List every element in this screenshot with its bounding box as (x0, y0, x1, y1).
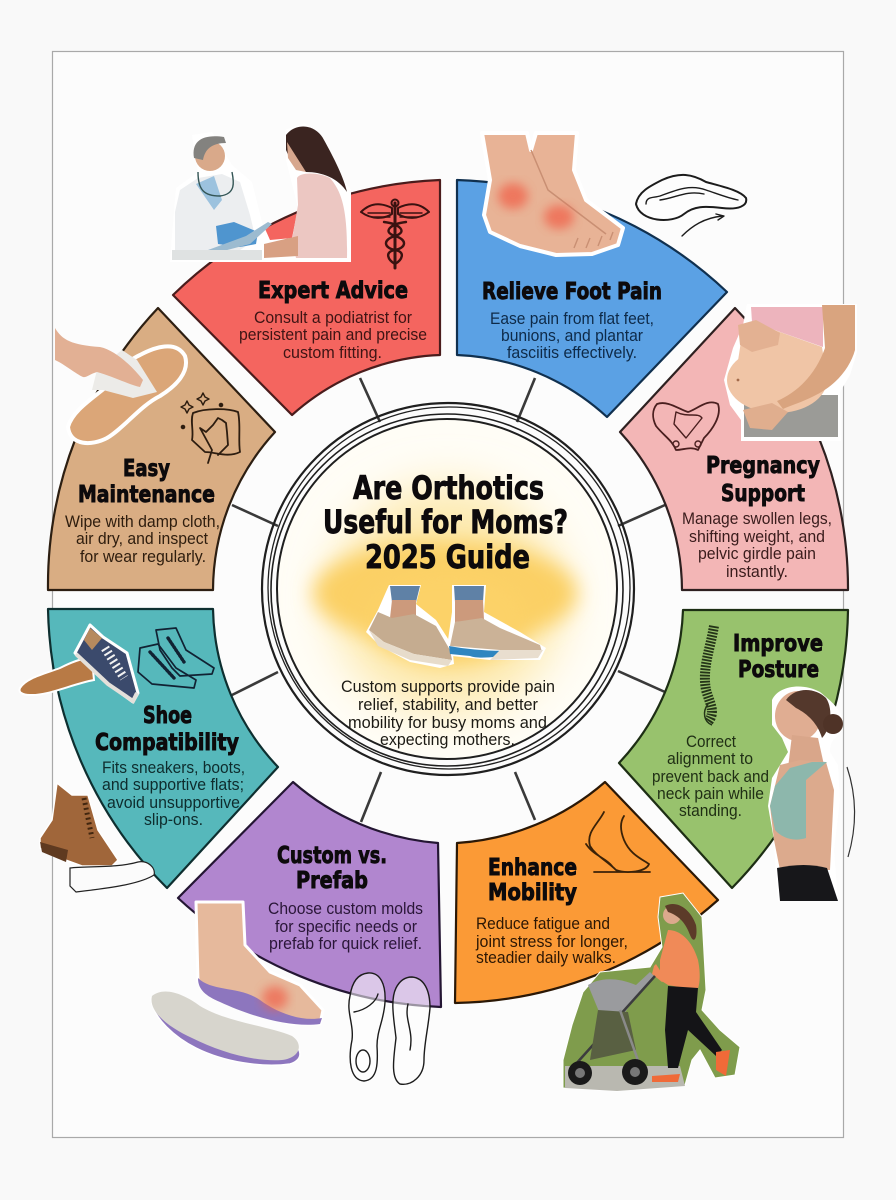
title: 2025 Guide (365, 538, 530, 576)
photo: white flat (70, 862, 154, 892)
panel: custom vs prefab (151, 782, 441, 1084)
description: Consult a podiatrist for (254, 308, 412, 327)
description: custom fitting. (283, 343, 382, 362)
photo: pregnant belly (724, 304, 857, 441)
green sector (619, 610, 848, 888)
panel: shoe compatibility (19, 609, 278, 892)
description: alignment to (667, 749, 753, 768)
heading: Posture (738, 657, 819, 683)
description (652, 732, 769, 820)
description: avoid unsupportive (107, 793, 240, 812)
panel: easy maintenance (48, 308, 275, 590)
description: Custom supports provide pain (341, 677, 555, 696)
heading (733, 631, 823, 683)
description: Correct (686, 732, 736, 751)
photo: supportive sneakers (366, 585, 546, 668)
icon: insole pair outlines (349, 973, 430, 1084)
description: Wipe with damp cloth, (65, 512, 220, 531)
description (475, 914, 628, 967)
description: expecting mothers. (380, 730, 515, 749)
description: fasciitis effectively. (507, 343, 637, 362)
description: joint stress for longer, (475, 932, 628, 951)
heading: Relieve Foot Pain (482, 279, 662, 305)
panel: central hub (262, 403, 634, 775)
photo: foot on insole (196, 902, 323, 1025)
pink sector (620, 308, 848, 590)
blue sector (457, 180, 727, 417)
description: and supportive flats; (102, 775, 244, 794)
description (65, 512, 220, 566)
description (341, 677, 555, 749)
title (323, 469, 568, 576)
heading: Compatibility (95, 730, 239, 756)
tan sector (48, 308, 275, 590)
description (268, 899, 423, 953)
panel: expert advice (170, 123, 440, 415)
spokes connecting hub to panels (232, 378, 665, 822)
icon: spine (705, 626, 714, 725)
description: for wear regularly. (80, 547, 206, 566)
photo: mother walking with stroller (563, 893, 740, 1091)
heading: Shoe (143, 703, 192, 729)
heading: Pregnancy (706, 453, 820, 479)
teal sector (48, 609, 278, 888)
description: standing. (679, 801, 742, 820)
description: slip-ons. (144, 810, 203, 829)
icon: insole sketch with arrow (636, 175, 746, 236)
description: for specific needs or (275, 917, 417, 936)
description: air dry, and inspect (76, 529, 208, 548)
heading: Mobility (488, 880, 577, 906)
heading (78, 456, 215, 508)
heading (95, 703, 239, 756)
description: mobility for busy moms and (348, 713, 547, 732)
heading: Maintenance (78, 482, 215, 508)
description: neck pain while (657, 784, 764, 803)
panel: relieve foot pain (457, 133, 746, 417)
description: Choose custom molds (268, 899, 423, 918)
description: relief, stability, and better (358, 695, 538, 714)
photo: ballet flat (19, 659, 94, 695)
decorative curve (847, 767, 855, 857)
description (682, 509, 832, 581)
photo: leather boot (40, 783, 118, 866)
title: Are Orthotics (353, 469, 544, 507)
photo: doctor and patient (170, 123, 351, 262)
frame (52, 52, 844, 1138)
panel: enhance mobility (455, 782, 740, 1091)
heading: Support (721, 481, 805, 507)
heading (706, 453, 820, 507)
description: Ease pain from flat feet, (490, 309, 654, 328)
icon: caduceus (361, 200, 429, 268)
heading: Custom vs. (277, 843, 387, 869)
description: shifting weight, and (689, 527, 825, 546)
photo: prefab insole (151, 991, 300, 1065)
description: instantly. (726, 562, 788, 581)
orange sector (455, 782, 718, 1003)
description (102, 758, 245, 829)
description (490, 309, 654, 362)
heading: Easy (123, 456, 170, 482)
description: pelvic girdle pain (698, 544, 816, 563)
icon: moving foot (586, 812, 650, 872)
concentric rings (262, 403, 634, 775)
description: Fits sneakers, boots, (102, 758, 245, 777)
photo: navy sneaker (75, 625, 138, 702)
description: bunions, and plantar (501, 326, 643, 345)
description: persistent pain and precise (239, 325, 427, 344)
description: prevent back and (652, 767, 769, 786)
purple sector (178, 782, 441, 1007)
heading (488, 855, 577, 906)
description (239, 308, 427, 362)
icon: cloth and hand with sparkles (181, 393, 240, 463)
heading: Improve (733, 631, 823, 657)
icon: high-top sneakers sketch (138, 628, 214, 688)
heading (277, 843, 387, 894)
heading: Prefab (296, 868, 368, 894)
description: prefab for quick relief. (269, 934, 422, 953)
hub disc (277, 419, 617, 759)
heading: Enhance (488, 855, 577, 881)
photo: painful feet (482, 133, 623, 255)
description: Manage swollen legs, (682, 509, 832, 528)
red sector (173, 180, 440, 415)
yellow glow (313, 485, 577, 715)
heading: Expert Advice (258, 278, 408, 304)
photo: woman standing straight (768, 686, 843, 901)
icon: pelvis (653, 402, 719, 450)
description: Reduce fatigue and (476, 914, 610, 933)
panel: improve posture (619, 610, 855, 901)
photo: insole being wiped (55, 328, 186, 443)
panel: pregnancy support (620, 304, 857, 590)
description: steadier daily walks. (476, 948, 616, 967)
title: Useful for Moms? (323, 503, 568, 541)
